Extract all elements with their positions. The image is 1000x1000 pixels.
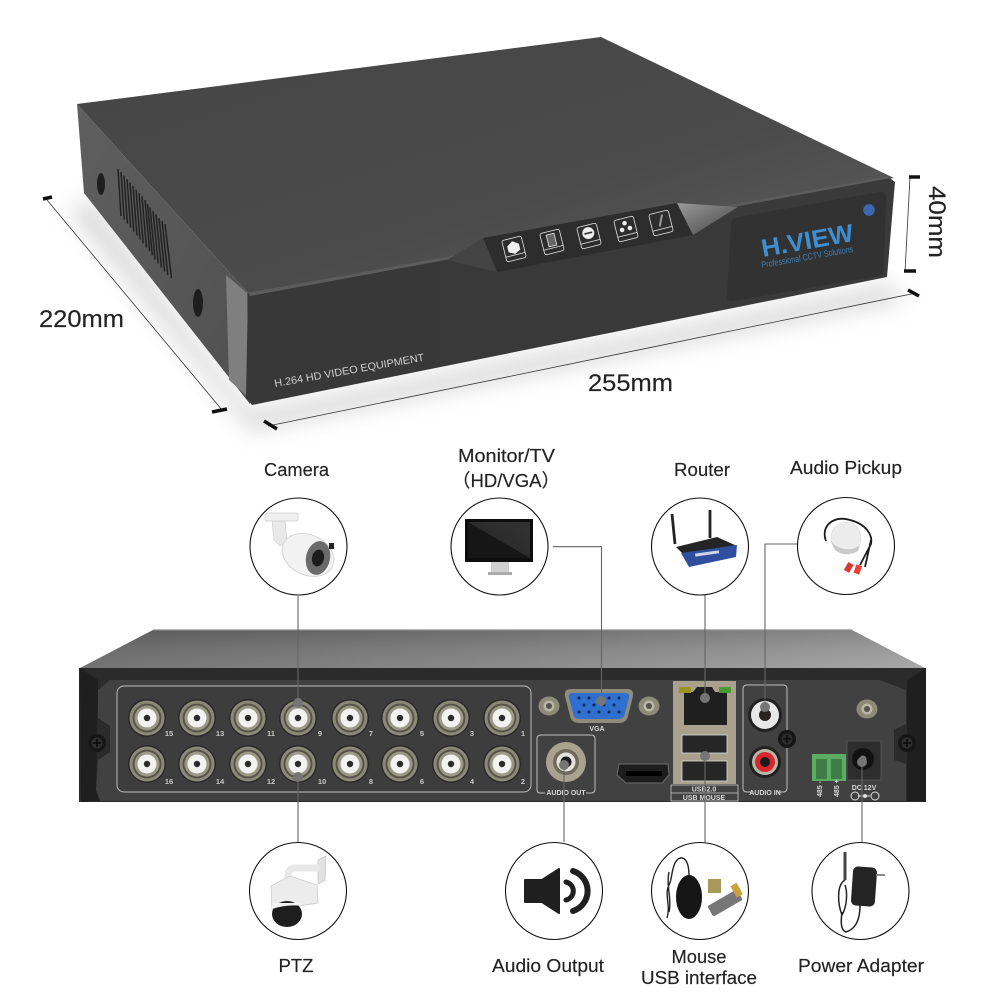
ethernet and USB block [673, 681, 736, 784]
channel numbers: 12 [267, 777, 275, 786]
dimension: 255mm width [264, 290, 919, 429]
DC power jack: DC 12V [852, 785, 877, 792]
top view device: H.VIEW DVR chassis [70, 37, 905, 430]
audio in ports [743, 685, 796, 797]
channel numbers: 5 [420, 729, 424, 738]
label: Mouse USB interface: Mouse [672, 946, 726, 967]
label: Power Adapter: Power Adapter [798, 955, 924, 976]
channel numbers: 16 [165, 777, 173, 786]
BNC connectors top and bottom rows [128, 699, 521, 783]
USB label: USB2.0 [692, 786, 716, 794]
circle icon: microphone pickup [798, 498, 894, 594]
VGA port [538, 689, 660, 733]
audio out port: AUDIO OUT [546, 790, 586, 797]
channel numbers: 7 [369, 729, 373, 738]
channel numbers: 3 [470, 729, 474, 738]
channel numbers [165, 729, 525, 786]
BNC input panel [117, 686, 531, 792]
label: Monitor/TV: （HD/VGA） [452, 470, 560, 491]
DC power jack [847, 741, 881, 800]
RS485 terminal: 485 + [834, 779, 841, 797]
connector lines with port dots [293, 544, 867, 842]
circle icon: PTZ dome camera [250, 842, 346, 940]
circle icon: speaker [506, 842, 602, 940]
HDMI port [617, 764, 669, 783]
circle icon: bullet camera [250, 498, 347, 595]
RS485 terminal [812, 754, 846, 797]
dimension: 220mm depth: 220mm [39, 306, 124, 333]
channel numbers: 13 [216, 729, 224, 738]
USB label [671, 785, 738, 802]
screws [88, 700, 916, 752]
channel numbers: 1 [521, 729, 525, 738]
circle icon: power adapter [812, 842, 909, 940]
label: Monitor/TV: Monitor/TV [458, 445, 556, 466]
front panel logo plate [727, 192, 886, 301]
label: Audio Output: Audio Output [492, 955, 604, 976]
circle icon: mouse and USB [652, 842, 748, 940]
VGA port: VGA [589, 726, 605, 733]
front panel buttons [502, 210, 673, 262]
channel numbers: 2 [521, 777, 525, 786]
channel numbers: 10 [318, 777, 326, 786]
channel numbers: 11 [267, 729, 275, 738]
circle icon: router [652, 498, 748, 595]
circle icon: monitor [451, 498, 548, 595]
dimension: 40mm height [904, 177, 950, 272]
channel numbers: 6 [420, 777, 424, 786]
label: Camera: Camera [264, 459, 330, 480]
side vent slots [118, 169, 172, 278]
front panel logo plate: H.VIEW [759, 219, 856, 263]
channel numbers: 15 [165, 729, 173, 738]
audio out port [537, 735, 595, 797]
label: Router: Router [674, 459, 730, 480]
label: PTZ: PTZ [278, 955, 314, 976]
dimension: 220mm depth [39, 197, 227, 412]
channel numbers: 8 [369, 777, 373, 786]
dimension: 40mm height: 40mm [923, 186, 950, 258]
RS485 terminal: 485 - [817, 780, 824, 797]
label: Monitor/TV [452, 445, 560, 491]
front panel logo plate: Professional CCTV Solutions [761, 244, 854, 270]
audio in ports: AUDIO IN [749, 790, 781, 797]
dimension: 255mm width: 255mm [588, 370, 673, 397]
front panel model text: H.264 HD VIDEO EQUIPMENT [273, 352, 426, 390]
channel numbers: 14 [216, 777, 225, 786]
label: Mouse USB interface: USB interface [641, 967, 757, 988]
label: Audio Pickup: Audio Pickup [790, 457, 902, 478]
label: Mouse USB interface [641, 946, 757, 988]
rear view device: DVR back panel [79, 630, 926, 802]
USB label: USB MOUSE [683, 795, 726, 802]
channel numbers: 4 [470, 777, 475, 786]
channel numbers: 9 [318, 729, 322, 738]
